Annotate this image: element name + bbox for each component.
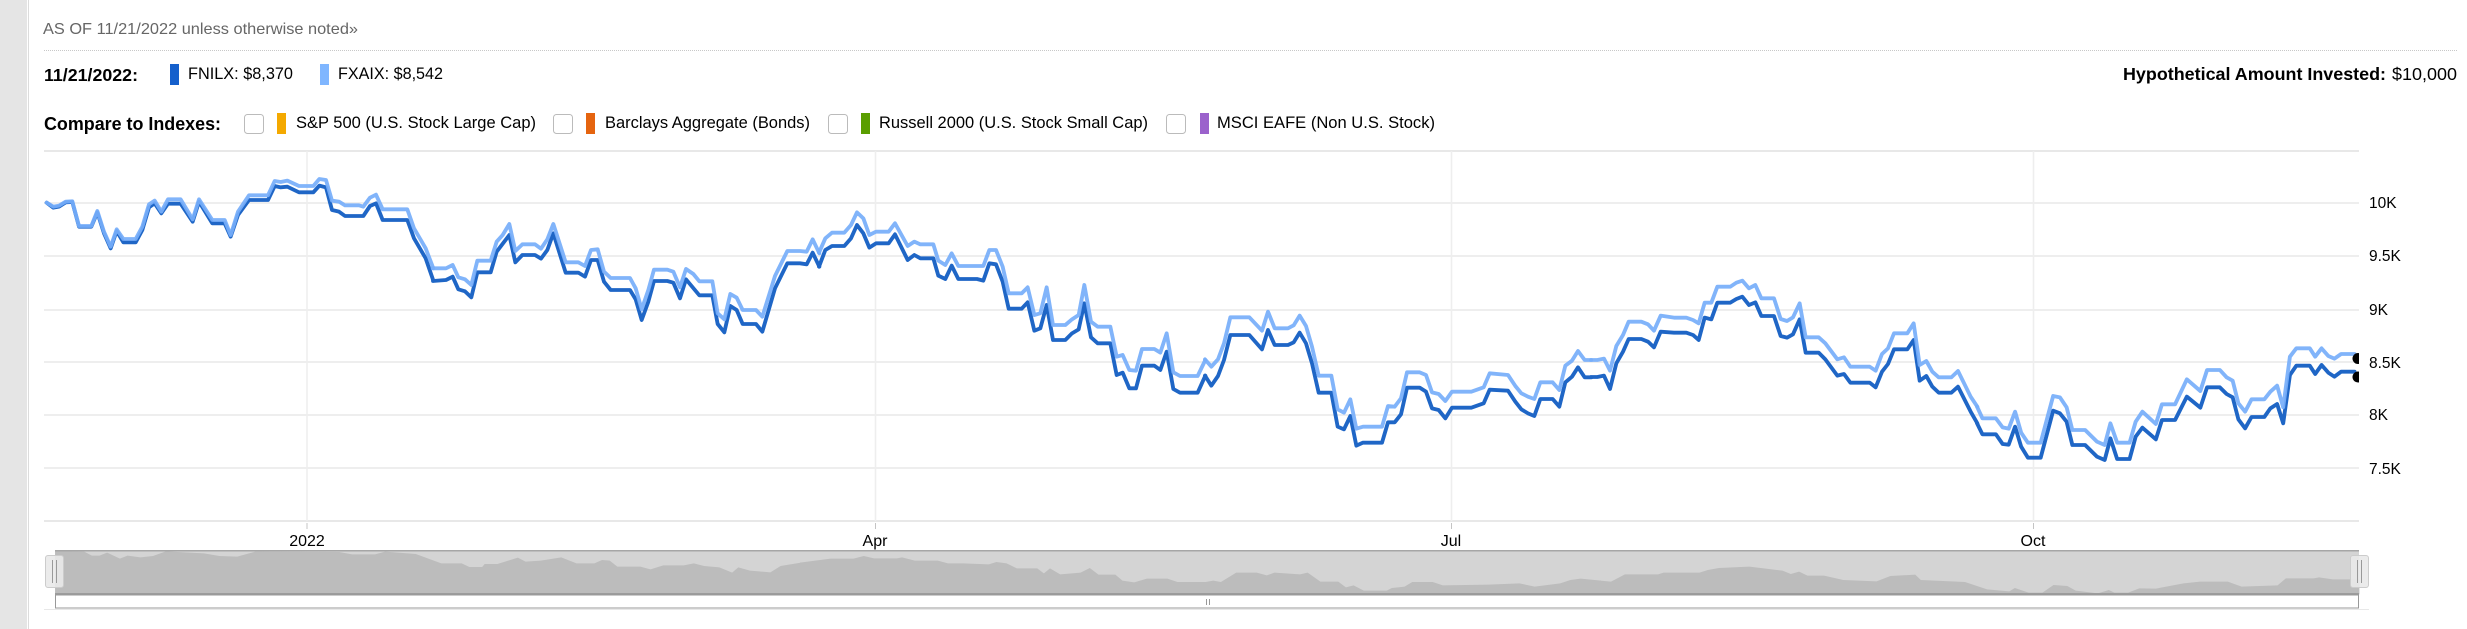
x axis labels: Jul: [1441, 533, 1461, 550]
FXAIX swatch: [320, 64, 329, 85]
hypothetical amount invested: Hypothetical Amount Invested:: [2123, 64, 2386, 84]
option: MSCI EAFE: MSCI EAFE (Non U.S. Stock): [1217, 114, 1435, 132]
y axis labels: 10K: [2369, 195, 2397, 212]
x axis labels: Apr: [863, 533, 888, 550]
series line: FNILX: [47, 186, 2355, 460]
end-of-line markers: [2352, 353, 2359, 382]
option: S&P 500: S&P 500 (U.S. Stock Large Cap): [296, 114, 536, 132]
hypothetical amount invested: $10,000: [2392, 64, 2457, 84]
legend: fund values: [44, 64, 443, 85]
left sidebar strip: [0, 0, 29, 629]
option: Barclays Aggregate: [554, 113, 810, 134]
FNILX swatch: [170, 64, 179, 85]
option: MSCI EAFE: [1166, 113, 1435, 134]
y axis labels: 8.5K: [2369, 355, 2402, 372]
navigator mini area chart: [55, 551, 2359, 594]
navigator scrollbar strip: [56, 595, 2358, 608]
line chart: [44, 151, 2402, 550]
scrollbar grip: [1206, 599, 1210, 605]
FNILX value: FNILX: $8,370: [188, 65, 293, 83]
left range handle: [46, 556, 64, 588]
x axis labels: [289, 533, 2046, 550]
FXAIX value: FXAIX: $8,542: [338, 65, 443, 83]
navigator background: [55, 550, 2359, 594]
range navigator: [44, 550, 2369, 610]
y axis labels: 9.5K: [2369, 248, 2402, 265]
option: Russell 2000: Russell 2000 (U.S. Stock Small Cap): [879, 114, 1148, 132]
option: Barclays Aggregate: Barclays Aggregate (Bonds): [605, 114, 810, 132]
compare to indexes controls: [44, 113, 1435, 134]
compare heading: Compare to Indexes:: [44, 114, 221, 134]
series line: FXAIX: [47, 179, 2355, 445]
x axis labels: Oct: [2021, 533, 2046, 550]
y axis labels: 7.5K: [2369, 461, 2402, 478]
legend date: 11/21/2022:: [44, 65, 138, 85]
y axis labels: 8K: [2369, 407, 2389, 424]
y axis labels: 9K: [2369, 302, 2389, 319]
y axis labels: [2369, 195, 2402, 478]
right range handle: [2350, 556, 2368, 588]
as-of note: AS OF 11/21/2022 unless otherwise noted»: [43, 21, 358, 38]
x axis labels: 2022: [289, 533, 325, 550]
